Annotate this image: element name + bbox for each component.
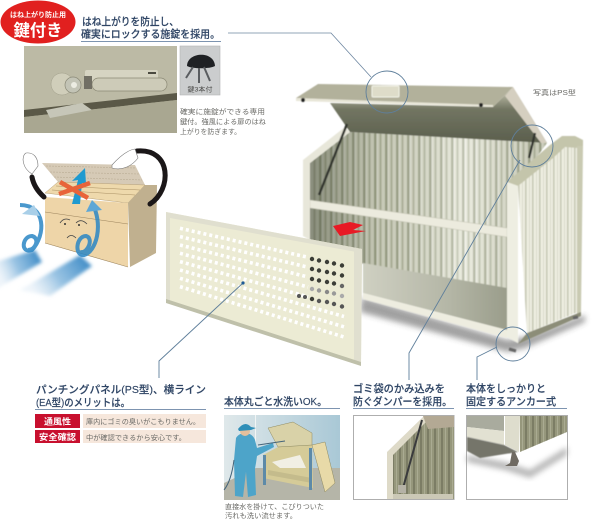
heading: damper [353,382,454,409]
merit row: ventilation: 庫内にゴミの臭いがこもりません。 [86,417,200,426]
badge: key included: はね上がり防止用 [10,10,66,19]
heading: anchor: 本体をしっかりと [466,382,546,395]
caption: lock description [180,107,266,136]
punching panel [166,212,362,366]
right swirl [77,203,98,255]
icon: three keys: 鍵3本付 [188,84,213,94]
lid top [296,84,513,107]
heading: lock feature [81,15,221,42]
white gloves [23,153,38,174]
panel dark holes [297,257,344,309]
cabinet side [128,185,157,267]
heading: punching panel merits [35,383,206,410]
front bottom rail [363,293,507,338]
heading: anchor [466,382,567,409]
orange cross mark [59,182,90,198]
heading: punching panel merits: (EA型)のメリットは。 [36,396,130,409]
right post [507,182,518,343]
heading: punching panel merits: パンチングパネル(PS型)、横ライン [36,383,206,396]
cabinet photo: PS type with open lid [296,84,585,352]
panel leader dot [241,281,245,285]
leader line: lock heading to lid [228,33,371,77]
removed panel [312,442,335,492]
lid underside [330,87,547,143]
cabinet roof [45,182,145,203]
photo note: 写真はPS型 [533,88,576,97]
side frame [577,146,583,314]
illustration: wind and cabinet character [0,149,165,296]
merit row: safety check: 中が確認できるから安心です。 [86,433,186,442]
side panel [518,147,578,333]
cabinet face [60,219,87,238]
caption: water wash: 直接水を掛けて、こびりついた [225,502,324,511]
lid lock handle [372,86,399,97]
caption: lock description: 上がりを防ぎます。 [180,127,241,136]
callout circles [366,71,553,361]
merit row: ventilation [35,414,206,428]
cabinet open lid [42,163,145,185]
badge: key included: 鍵付き [14,21,62,40]
washed cabinet body [263,445,313,488]
floor [363,263,507,330]
heading: lock feature: はね上がりを防止し、 [82,15,179,28]
heading: damper: ゴミ袋のかみ込みを [353,382,445,395]
side top cap [507,136,583,186]
left post and frame [303,127,350,240]
ground shadow [360,297,585,352]
back wall [310,132,547,290]
worker [234,433,274,497]
merit row: ventilation: 通風性 [44,416,72,426]
dampers [319,124,535,195]
washed cabinet lid [268,422,312,447]
illustration: washing the cabinet [224,415,340,500]
blue up arrow [72,168,86,204]
cabinet front [45,197,128,267]
left swirl [20,205,41,251]
heading: damper: 防ぐダンパーを採用。 [353,395,452,408]
heading: anchor: 固定するアンカー式 [466,395,556,408]
caption: lock description: 鍵付。強風による扉のはね [180,117,266,126]
photo: anchor close-up [466,416,568,500]
wind streaks [0,250,92,296]
heading: water wash: 本体丸ごと水洗いOK。 [224,395,327,408]
leader lines to lower headings [159,160,520,380]
red arrow [333,222,366,236]
casters [509,317,578,351]
photo: damper close-up [354,416,454,500]
photo: lock close-up [24,46,177,133]
caption: lock description: 確実に施錠ができる専用 [180,107,265,116]
caption: water wash [225,502,324,519]
badge: key included [0,0,76,44]
icon: three keys [180,46,220,95]
merit row: safety check: 安全確認 [39,432,77,442]
black arms [32,177,44,197]
panel holes [180,228,344,337]
merit row: safety check [35,430,206,443]
heading: lock feature: 確実にロックする施錠を採用。 [81,28,220,40]
wash hose [224,441,285,490]
middle rail [310,200,507,237]
